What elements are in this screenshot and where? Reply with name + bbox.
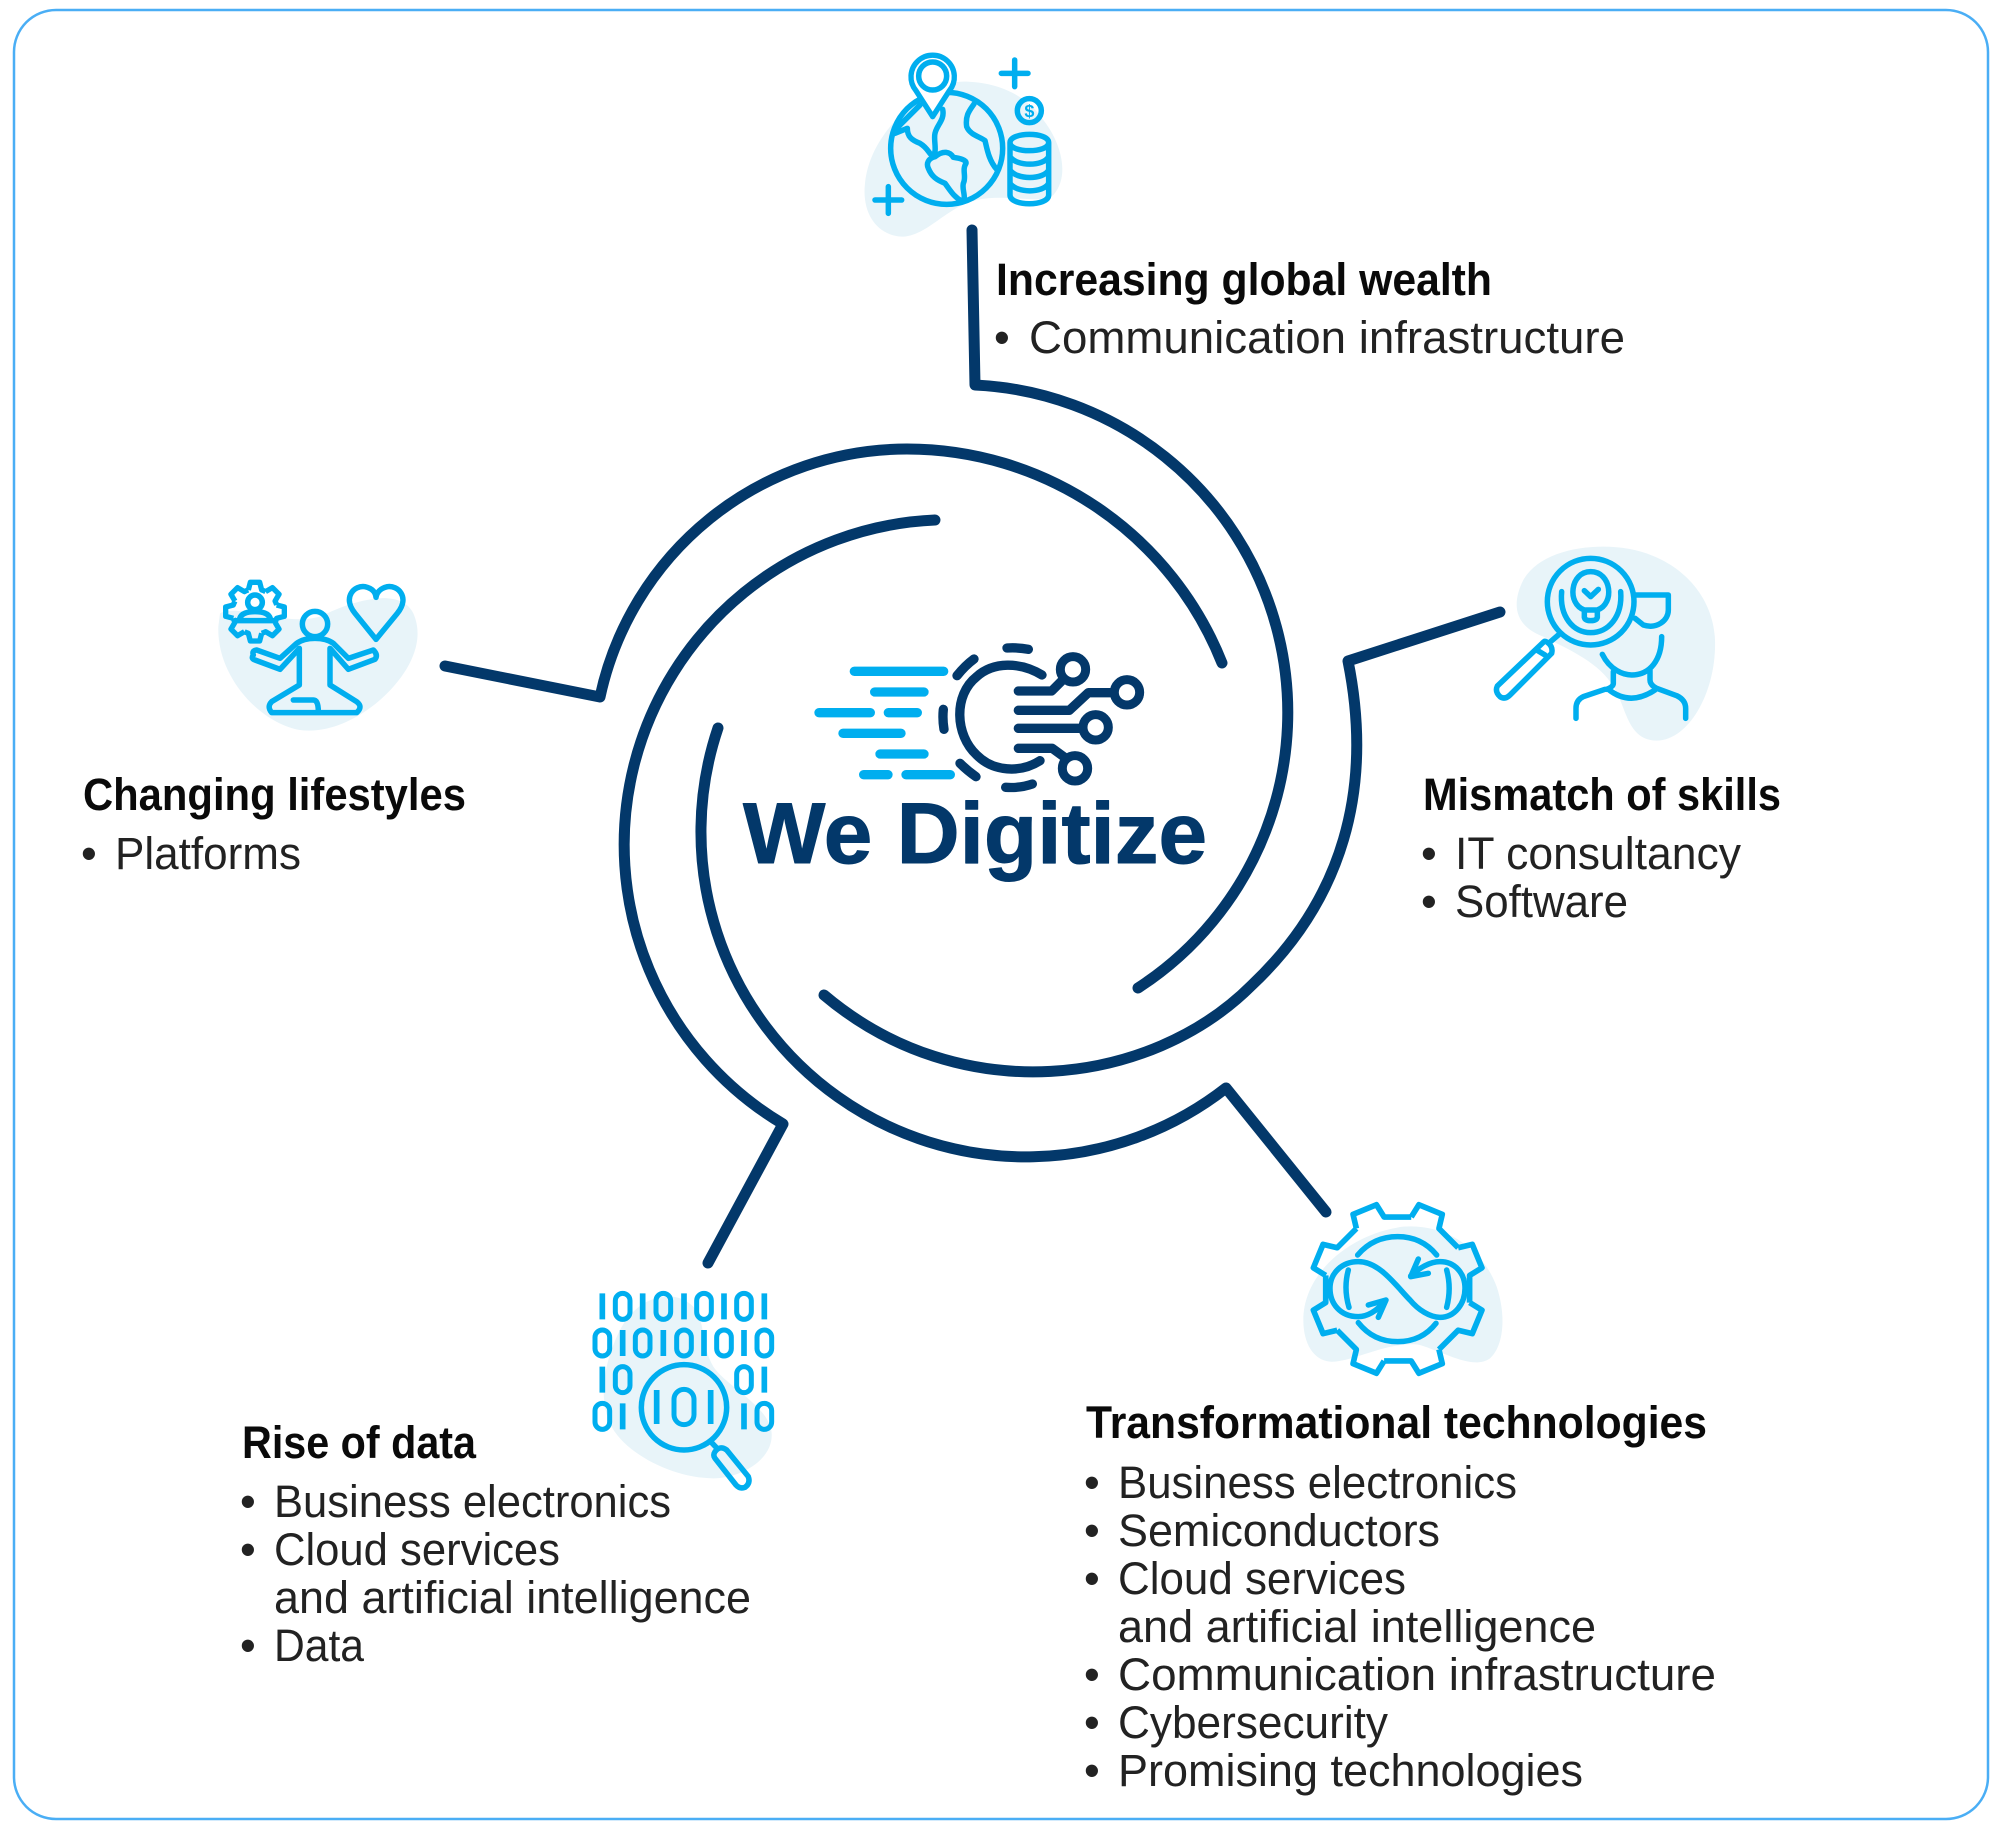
bullet list: Platforms	[115, 828, 301, 879]
heading: Transformational technologies	[1086, 1397, 1707, 1448]
bullet list: and artificial intelligence	[1118, 1601, 1596, 1652]
speed lines	[819, 671, 950, 775]
dollar coin: $	[1024, 101, 1034, 121]
icon: transformational technologies	[1303, 1194, 1502, 1384]
globe	[891, 92, 1003, 204]
head and shoulders	[1576, 595, 1686, 718]
heading: Mismatch of skills	[1423, 769, 1781, 820]
bullet list	[240, 1476, 751, 1671]
circuit nodes	[1060, 657, 1140, 781]
bullet list: •	[240, 1476, 256, 1527]
bullet list: •	[1084, 1697, 1100, 1748]
bullet list	[1084, 1457, 1716, 1796]
text: increasing global wealth	[994, 254, 1625, 363]
arrow arc: bottom right to left	[701, 728, 1326, 1212]
bullet list: and artificial intelligence	[274, 1572, 751, 1623]
logo mark	[819, 648, 1140, 788]
bullet list: Business electronics	[274, 1476, 671, 1527]
text: changing lifestyles	[81, 769, 466, 879]
bullet list: •	[1084, 1649, 1100, 1700]
heading: Increasing global wealth	[996, 254, 1492, 305]
heading: Rise of data	[242, 1417, 477, 1468]
icon background blob	[865, 82, 1062, 237]
logo wordmark: We Digitize	[743, 786, 1207, 882]
coin stack	[1010, 134, 1049, 204]
arrow arc: top to right	[972, 230, 1288, 988]
bullet list: •	[81, 828, 97, 879]
bullet list: Business electronics	[1118, 1457, 1517, 1508]
chip ring	[960, 665, 1042, 769]
bullet list: Semiconductors	[1118, 1505, 1440, 1556]
bullet list: •	[994, 312, 1010, 363]
text: mismatch of skills	[1421, 769, 1781, 927]
magnifier lens	[1547, 558, 1634, 645]
bullet list: Data	[274, 1620, 365, 1671]
bullet list: Communication infrastructure	[1118, 1649, 1716, 1700]
meditating figure	[252, 611, 376, 713]
icon: global wealth	[865, 55, 1062, 237]
bullet list: •	[240, 1524, 256, 1575]
gear with person	[226, 582, 284, 641]
bullet list: •	[1084, 1745, 1100, 1796]
heading: Changing lifestyles	[83, 769, 466, 820]
bullet list: Communication infrastructure	[1029, 312, 1625, 363]
magnifier handle	[1496, 635, 1558, 698]
gear outline	[1303, 1194, 1492, 1384]
bullet list: Promising technologies	[1118, 1745, 1583, 1796]
bullet list: Cybersecurity	[1118, 1697, 1388, 1748]
map pin	[911, 55, 954, 117]
arrow arc: right to bottom	[824, 612, 1500, 1072]
bullet list: •	[240, 1620, 256, 1671]
light bulb	[1573, 572, 1609, 621]
bullet list: Cloud services	[1118, 1553, 1406, 1604]
icon: changing lifestyles	[218, 582, 418, 731]
sparkle bottom	[875, 187, 902, 213]
binary zeros	[595, 1293, 772, 1429]
bullet list: •	[1084, 1457, 1100, 1508]
arrow arc: left to right	[445, 449, 1222, 697]
icon background blob	[604, 1296, 772, 1478]
icon: mismatch of skills	[1496, 547, 1715, 741]
text: rise of data	[240, 1417, 751, 1671]
lens inner arc	[1561, 592, 1621, 633]
continents	[895, 104, 997, 202]
centre logo: We Digitize	[743, 648, 1207, 882]
sparkle top	[1001, 60, 1028, 87]
pin hole	[919, 62, 947, 90]
bullet list: •	[1084, 1553, 1100, 1604]
bullet list: Software	[1455, 876, 1628, 927]
infinity loop with arrows	[1330, 1237, 1465, 1342]
ring dashes	[943, 648, 1032, 788]
heart	[349, 587, 403, 639]
bullet list: •	[1421, 876, 1437, 927]
bullet list	[1421, 828, 1741, 927]
binary ones	[602, 1293, 764, 1429]
magnifier	[641, 1365, 749, 1488]
dollar coin	[1017, 99, 1041, 123]
icon background blob	[1303, 1226, 1502, 1362]
bullet list: •	[1421, 828, 1437, 879]
bullet list: Cloud services	[274, 1524, 560, 1575]
icon background blob	[1517, 547, 1715, 741]
icon background blob	[218, 598, 418, 731]
bullet list: •	[1084, 1505, 1100, 1556]
icon: rise of data	[595, 1293, 772, 1488]
text: transformational technologies	[1084, 1397, 1716, 1796]
bullet list: IT consultancy	[1455, 828, 1741, 879]
circuit traces	[1018, 679, 1113, 758]
arrow arc: bottom left to top	[624, 520, 935, 1263]
spiral diagram	[445, 230, 1500, 1263]
